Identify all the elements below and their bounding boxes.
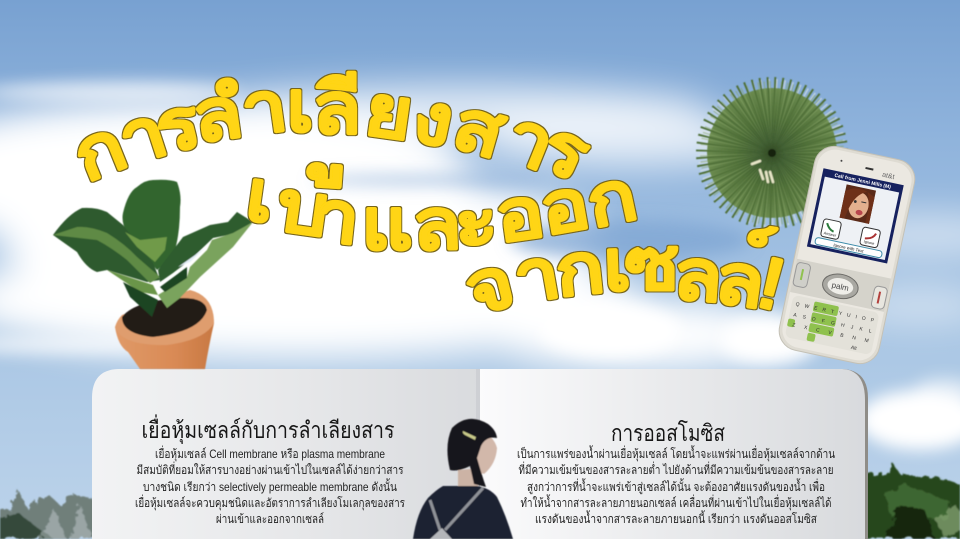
line 2: ก — [580, 155, 644, 243]
keyboard: A S D F G H J K L — [793, 312, 872, 335]
line 1: ย — [360, 70, 418, 156]
screen: Call from Jenni Mills (M) — [834, 173, 892, 191]
icon: spiky green tree top — [707, 88, 837, 218]
leaves — [53, 180, 253, 317]
keyboard: Q W E R T Y U I O P — [795, 301, 875, 324]
line 2: แ — [361, 185, 413, 265]
line 2: เ — [241, 156, 279, 238]
line 1: ู — [308, 77, 354, 187]
text block: cell membrane — [135, 445, 405, 526]
keyboard: Z X C V B N M — [792, 322, 869, 344]
heading: osmosis: การออสโมซิส — [611, 420, 725, 446]
line 3: ! — [751, 243, 792, 325]
line 2: อ — [534, 164, 596, 251]
line 2 — [241, 155, 644, 266]
line 2: ล — [411, 184, 463, 266]
line 1: เ — [286, 67, 314, 147]
carrier label: at&t — [881, 172, 895, 181]
tree line: bottom right — [865, 462, 960, 539]
figure: person with backpack — [413, 419, 513, 539]
pot — [115, 323, 214, 369]
text block: cell membrane: ผ่านเข้าและออกจากเซลล์ — [216, 512, 324, 526]
line 3: า — [508, 233, 566, 319]
soil — [122, 298, 207, 337]
heading: cell membrane: เยื่อหุ้มเซลล์กับการลำเลียงสาร — [142, 414, 394, 444]
screen: Ignore with Text — [833, 242, 865, 254]
keyboard: Alt — [850, 345, 858, 352]
line 1 — [62, 66, 601, 197]
answer button — [820, 218, 842, 240]
text block: osmosis: แรงดันของน้ำจากสารละลายภายนอกนี้ เรียกว่า แรงดันออสโมซิส — [535, 510, 818, 526]
line 1: า — [494, 96, 566, 187]
line 1: ร — [147, 82, 208, 170]
line 3: ก — [551, 228, 608, 312]
navigation buttons: palm — [831, 281, 850, 293]
title: three curved lines of yellow letters — [62, 66, 792, 330]
line 3: ์ — [739, 225, 778, 319]
line 3: ล — [710, 238, 770, 324]
line 1: ลำ — [187, 66, 292, 158]
icon: potted fiddle leaf plant — [53, 180, 253, 369]
line 1: ง — [406, 77, 461, 163]
line 1: ก — [62, 105, 137, 197]
text block: cell membrane: เยื่อหุ้มเซลล์จะควบคุมชนิดและอัตราการลำเลียงโมเลกุลของสาร — [135, 494, 405, 511]
open book panel — [92, 369, 868, 539]
screen: Answer — [823, 231, 837, 238]
text block: cell membrane: เยื่อหุ้มเซลล์ Cell membrane หรือ plasma membrane — [155, 445, 385, 462]
tree line: bottom left — [0, 490, 95, 539]
line 2: บ — [272, 166, 334, 252]
ignore button — [859, 227, 881, 248]
text block: osmosis: ทำให้น้ำจากสารละลายภายนอกเซลล์ เคลื่อนที่ผ่านเข้าไปในเยื่อหุ้มเซลล์ได้ — [520, 494, 832, 511]
line 3: จ — [457, 242, 522, 330]
text block: osmosis: เป็นการแพร่ของน้ำผ่านเยื่อหุ้มเซลล์ โดยน้ำจะแพร่ผ่านเยื่อหุ้มเซลล์จากด้าน — [517, 445, 835, 462]
line 1: ลี — [312, 69, 362, 149]
line 3: ล — [671, 235, 725, 318]
screen — [807, 168, 904, 264]
text block: osmosis — [517, 445, 835, 526]
line 2: ะ — [452, 181, 500, 263]
text block: osmosis: สูงกว่าการที่น้ำจะแพร่เข้าสู่เซลล์ได้นั้น จะต้องอาศัยแรงดันของน้ำ เพื่อ — [527, 478, 825, 495]
text block: cell membrane: บางชนิด เรียกว่า selectively permeable membrane ดังนั้น — [143, 478, 397, 494]
line 3: ซ — [625, 225, 679, 305]
icon: palm smartphone — [775, 143, 919, 367]
line 2: อ — [490, 172, 549, 258]
caller photo — [840, 184, 876, 224]
screen: Ignore — [863, 240, 875, 246]
line 2: า — [310, 176, 364, 260]
keyboard — [785, 295, 880, 355]
line 3 — [457, 225, 792, 330]
line 1: ร — [529, 106, 601, 196]
text block: cell membrane: มีสมบัติที่ยอมให้สารบางอย่างผ่านเข้าไปในเซลล์ได้ง่ายกว่าสาร — [136, 461, 404, 477]
text block: osmosis: ที่มีความเข้มข้นของสารละลายต่ำ ไปยังด้านที่มีความเข้มข้นของสารละลาย — [518, 461, 834, 477]
line 1: ส — [445, 84, 514, 174]
line 1: า — [109, 91, 177, 181]
line 3: เ — [602, 226, 632, 306]
navigation buttons — [790, 259, 891, 312]
